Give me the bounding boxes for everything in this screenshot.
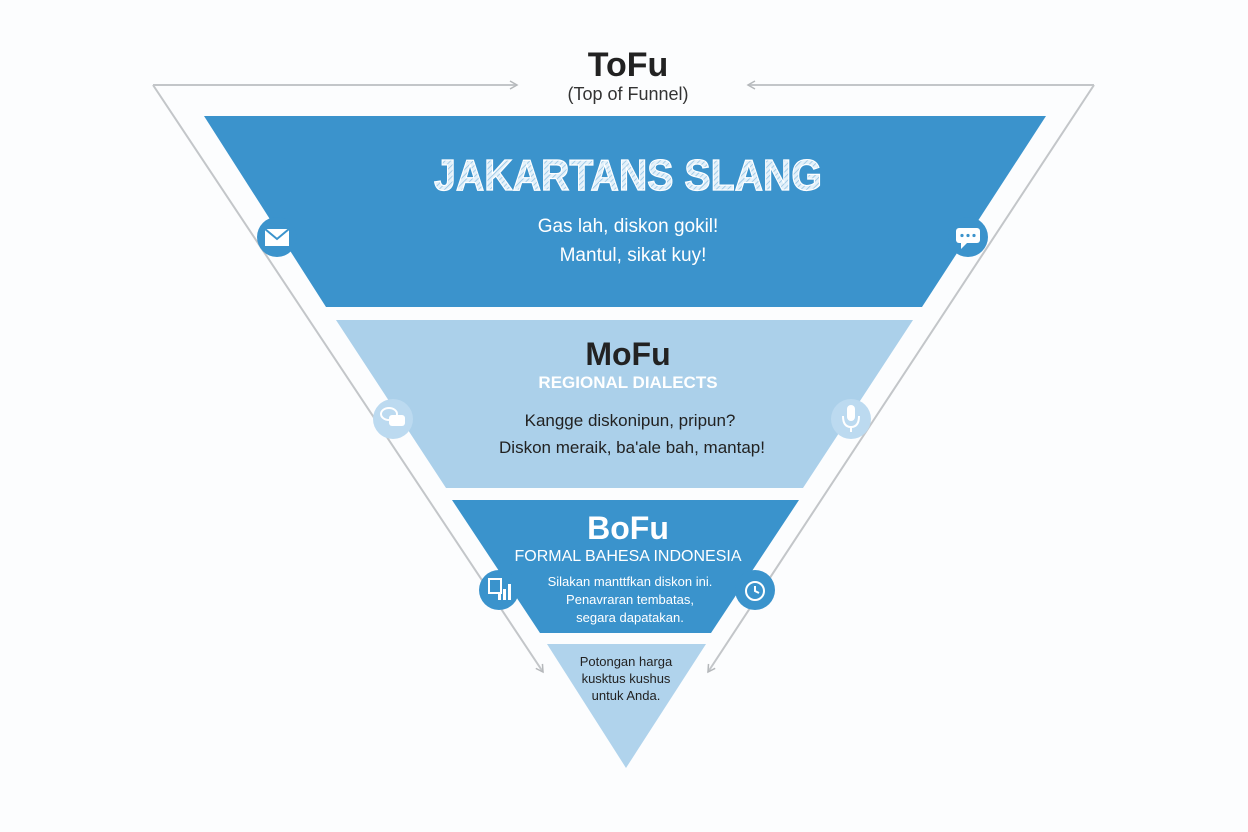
panel: BoFu formal bahasa: segara dapatakan. [576, 610, 684, 625]
title: ToFu: ToFu [588, 46, 668, 84]
icon: speech bubbles [373, 399, 413, 439]
panel: bottom tip [547, 644, 706, 768]
panel: MoFu regional dialects [336, 320, 913, 488]
panel: Jakartans slang: Mantul, sikat kuy! [560, 245, 706, 266]
panel: MoFu regional dialects: Diskon meraik, ba'ale bah, mantap! [499, 438, 765, 457]
panel: MoFu regional dialects: REGIONAL DIALECTS [538, 373, 718, 392]
panel: MoFu regional dialects: MoFu [585, 336, 671, 372]
icon: envelope [257, 217, 297, 257]
panel: Jakartans slang [204, 116, 1046, 307]
panel: BoFu formal bahasa: Penavraran tembatas, [566, 592, 694, 607]
panel: BoFu formal bahasa [452, 500, 799, 633]
panel: bottom tip: untuk Anda. [592, 688, 660, 703]
panel: BoFu formal bahasa: FORMAL BAHESA INDONESIA [514, 548, 742, 565]
panel: MoFu regional dialects: Kangge diskonipun, pripun? [525, 411, 735, 430]
icon: chat bubble [948, 217, 988, 257]
icon: clock [735, 570, 775, 610]
panel: bottom tip: kusktus kushus [582, 671, 671, 686]
panel: Jakartans slang: JAKARTANS SLANG [434, 151, 822, 200]
panel: bottom tip: Potongan harga [580, 654, 673, 669]
panel: BoFu formal bahasa: BoFu [587, 510, 669, 546]
outline arrows [153, 85, 1094, 672]
panel: BoFu formal bahasa: Silakan manttfkan diskon ini. [548, 574, 712, 589]
title: ToFu: (Top of Funnel) [567, 84, 689, 104]
panel: Jakartans slang: Gas lah, diskon gokil! [538, 216, 718, 237]
title: ToFu [567, 46, 689, 104]
icon: report chart [479, 570, 519, 610]
icon: microphone [831, 399, 871, 439]
